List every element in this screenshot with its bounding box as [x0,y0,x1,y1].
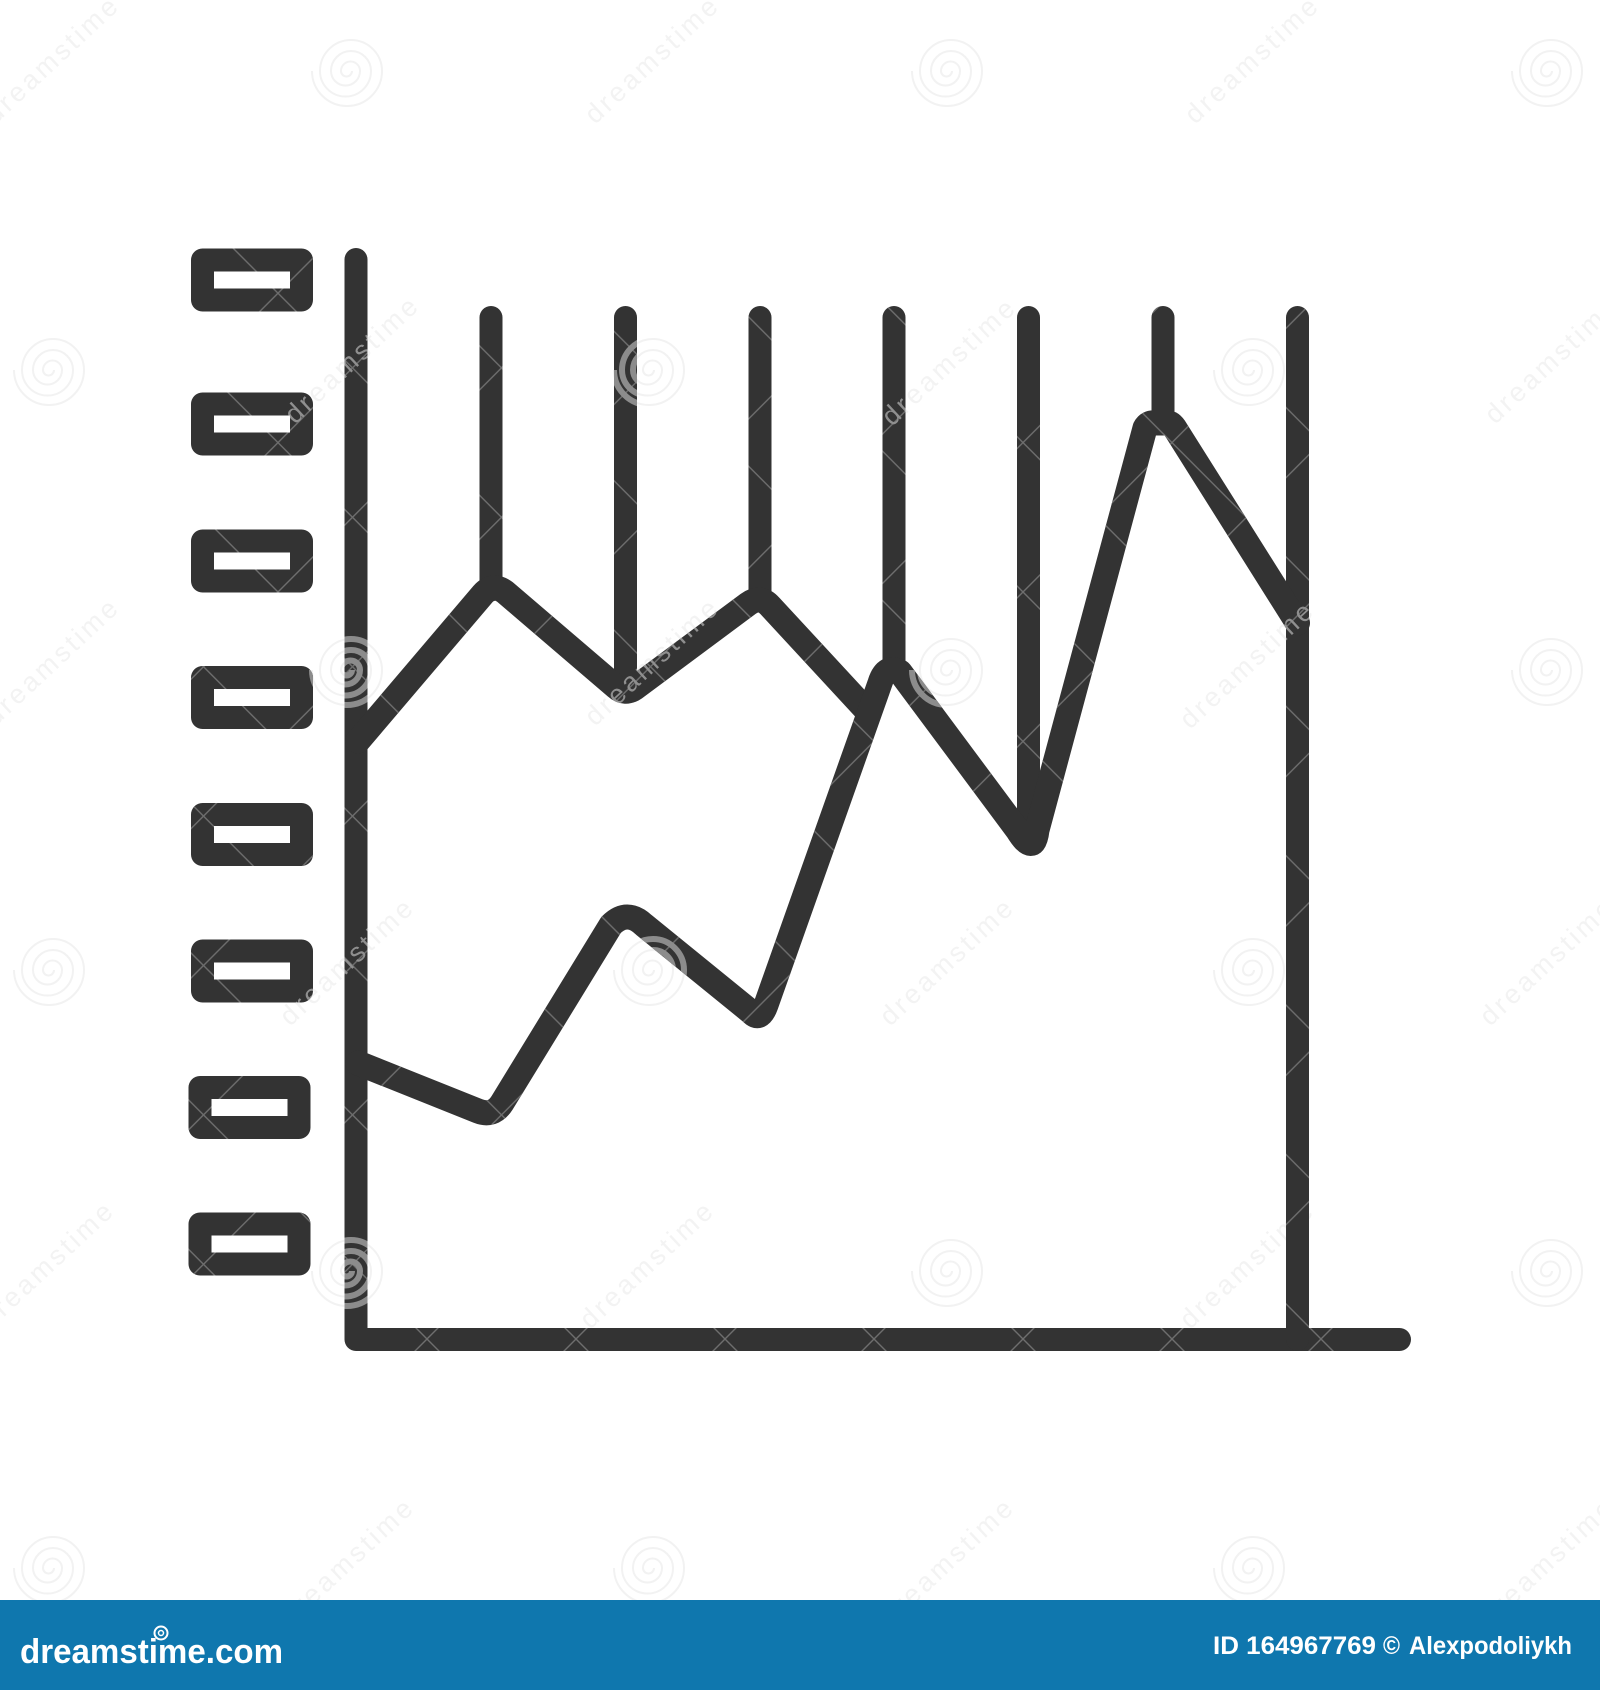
lower data series [358,423,1298,1113]
watermark showing through the dark icon strokes: dreamstime [279,292,423,429]
watermark layer: dreamstime [876,294,1020,431]
footer image id and credit [1213,1632,1572,1660]
watermark layer: dreamstime [874,894,1018,1031]
watermark layer: dreamstime [874,1494,1018,1631]
footer band [0,1600,1600,1690]
watermark showing through the dark icon strokes [188,248,1334,1351]
chart axes [356,260,1400,1340]
legend tick boxes [200,260,302,1264]
upper data series [358,588,868,741]
watermark showing through the dark icon strokes: dreamstime [1174,597,1318,734]
watermark layer: dreamstime [579,594,723,731]
vertical gridlines [491,318,1298,1340]
watermark layer: dreamstime [279,292,423,429]
watermark showing through the dark icon strokes: dreamstime [274,894,418,1031]
watermark showing through the dark icon strokes: dreamstime [876,294,1020,431]
line chart icon [200,260,1400,1340]
watermark showing through the dark icon strokes: dreamstime [574,1197,718,1334]
watermark layer: dreamstime [274,1494,418,1631]
footer image id and credit: Alexpodoliykh [1409,1632,1572,1660]
watermark showing through the dark icon strokes: dreamstime [579,594,723,731]
watermark layer: dreamstime [1174,1197,1318,1334]
footer image id and credit: © [1383,1632,1401,1660]
watermark layer: dreamstime [274,894,418,1031]
footer image id and credit: ID 164967769 [1213,1632,1376,1660]
watermark layer: dreamstime [1174,597,1318,734]
footer logo: dreamstime.com [20,1633,283,1671]
watermark layer: dreamstime [574,1197,718,1334]
